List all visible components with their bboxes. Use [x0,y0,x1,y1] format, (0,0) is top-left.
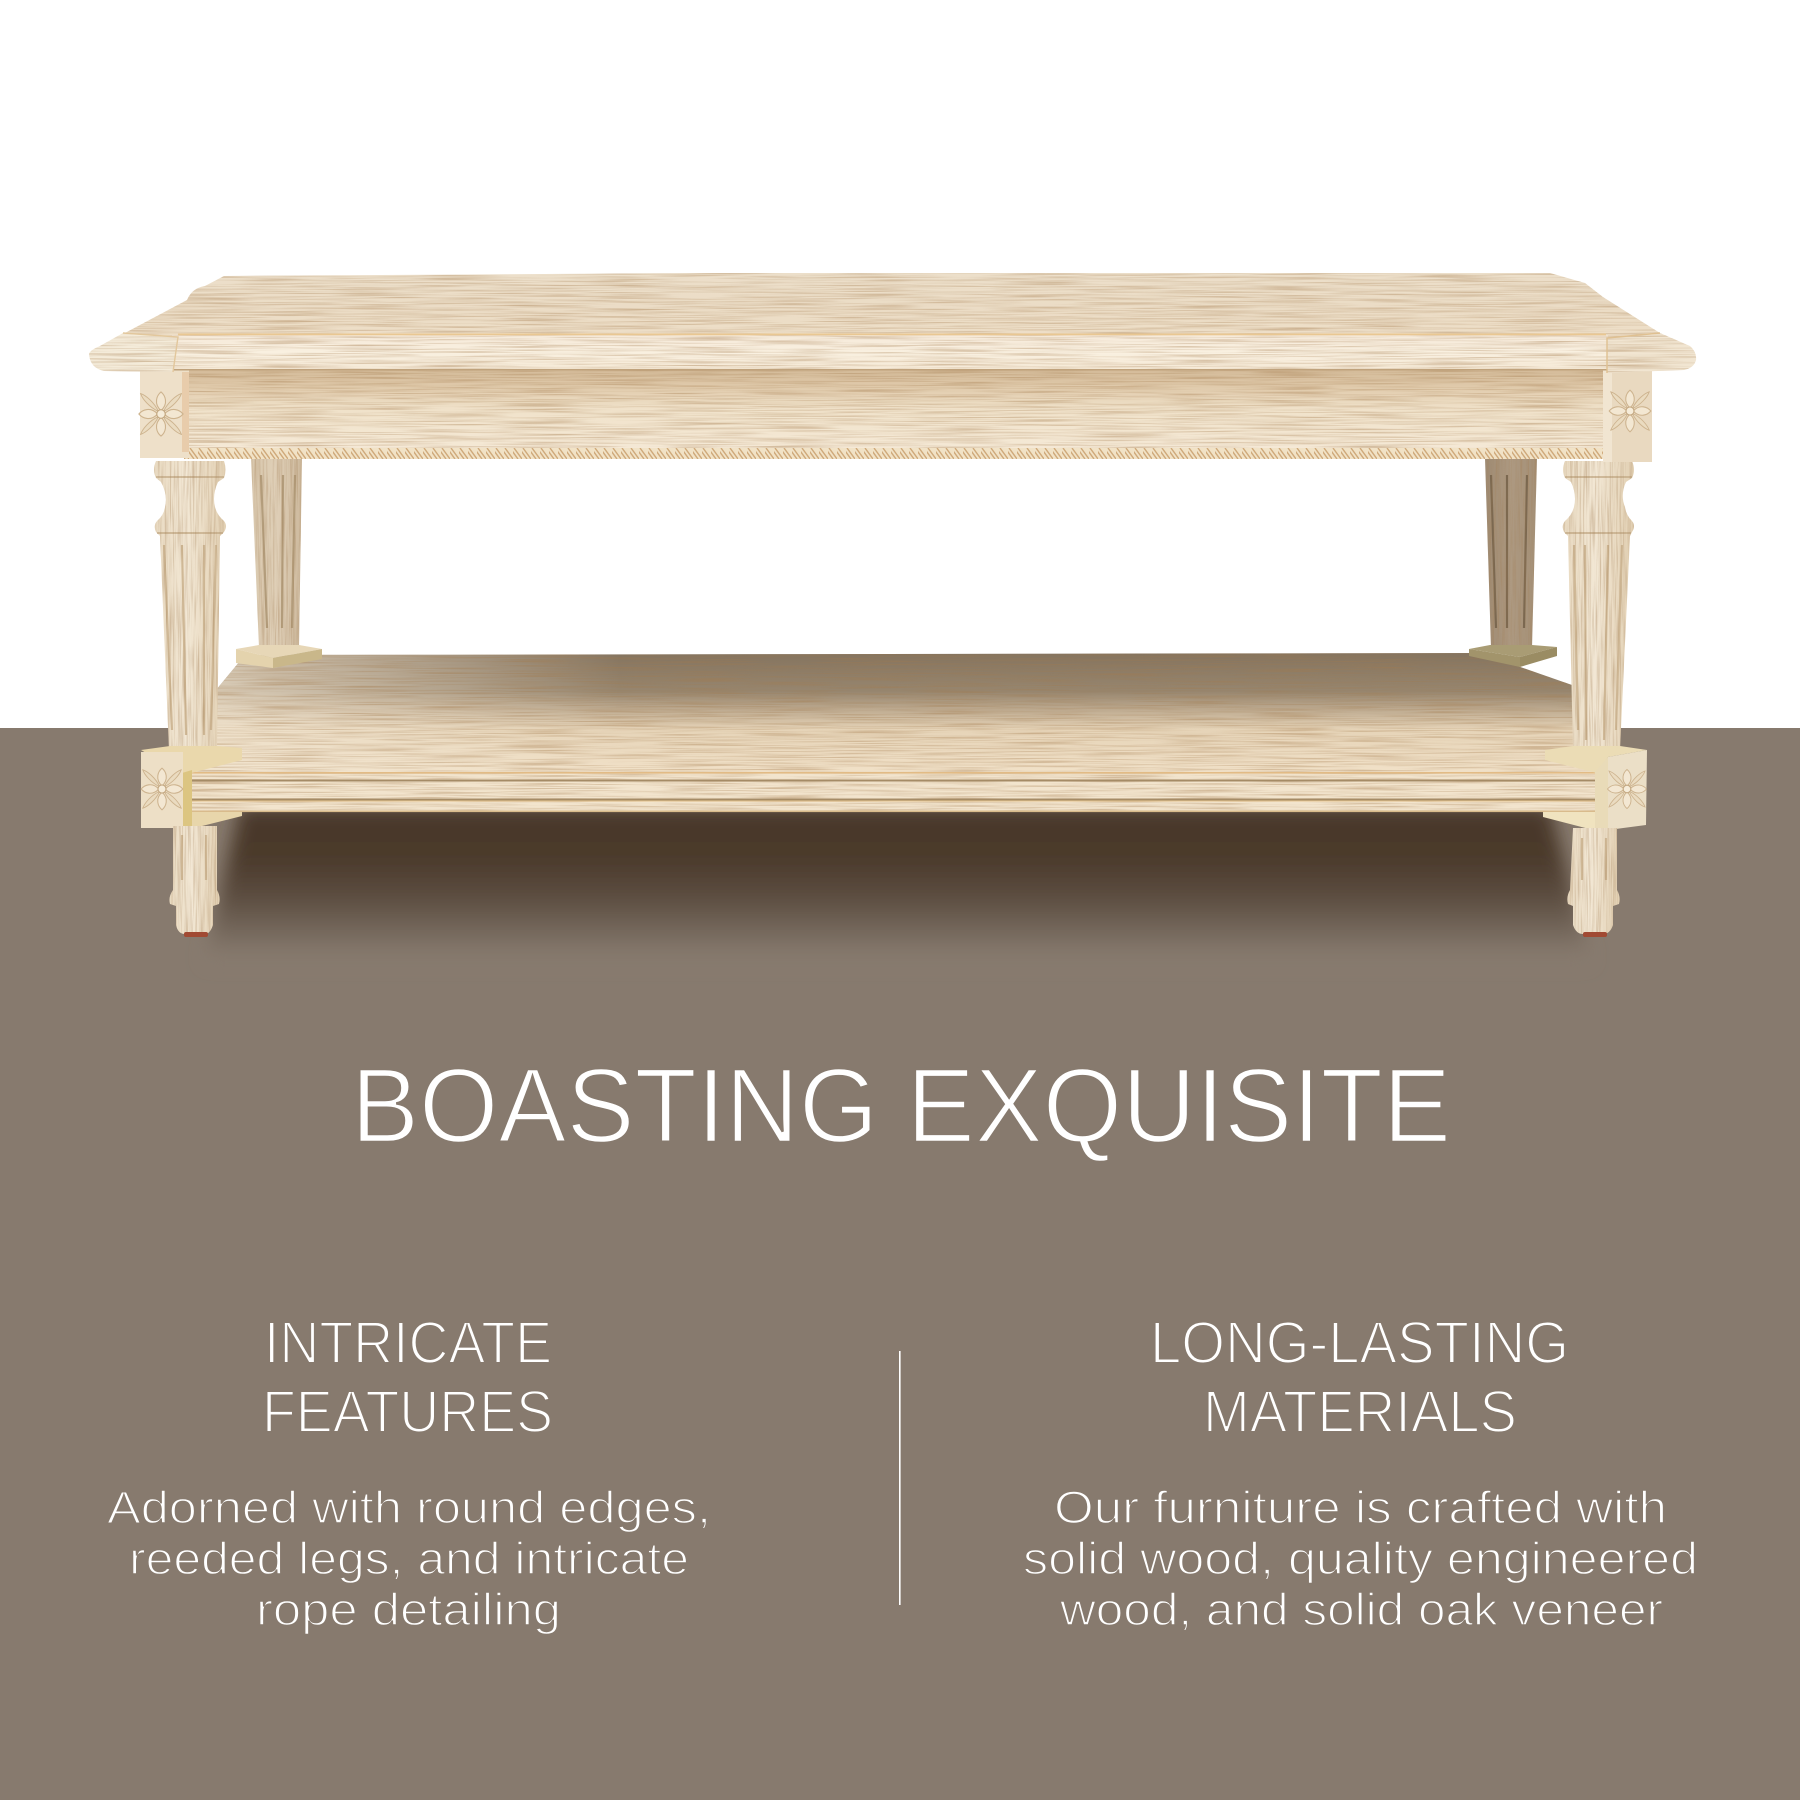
front right lower block [1543,746,1647,831]
right feature description: Our furniture is crafted with [1054,1482,1667,1533]
table top left corner bevel [89,333,178,372]
front left leg [141,461,242,937]
left feature column [107,1310,711,1635]
left feature heading: FEATURES [262,1379,553,1445]
rosette carving [139,392,183,436]
floor shadow under table [205,806,1590,962]
front right leg [1543,461,1647,937]
main heading: BOASTING EXQUISITE [351,1047,1451,1165]
back left plinth [236,645,322,668]
right feature heading: MATERIALS [1203,1379,1517,1445]
back left leg shaft [251,458,302,648]
table top surface [120,273,1660,340]
shelf top surface [193,653,1597,773]
right feature description: wood, and solid oak veneer [1059,1584,1663,1635]
coffee table illustration [89,273,1696,937]
left feature description: rope detailing [256,1584,561,1635]
back right leg shaft [1485,458,1537,648]
right feature description: solid wood, quality engineered [1023,1533,1698,1584]
back right leg [1469,458,1557,667]
rope detail [184,448,1608,459]
right feature description [1023,1482,1698,1635]
back right plinth [1469,645,1557,667]
left feature description: reeded legs, and intricate [129,1533,689,1584]
left feature heading: INTRICATE [264,1310,552,1376]
table top front edge [172,334,1608,370]
front right foot [1567,828,1620,937]
left feature heading [262,1310,553,1445]
rosette carving [1608,770,1646,808]
rosette carving [1609,390,1651,432]
table top right corner bevel [1607,333,1696,373]
column divider [899,1351,901,1605]
front left leg upper shaft [154,461,226,750]
left corner block [139,370,189,458]
left feature description [107,1482,711,1635]
white upper background [0,0,1800,728]
lower shelf [190,653,1597,812]
upper table top assembly [89,273,1696,462]
right corner block [1603,370,1652,462]
front right leg upper shaft [1563,461,1634,750]
shelf front moulding [190,772,1596,812]
back left leg [236,458,322,668]
right feature heading [1150,1310,1569,1445]
taupe lower panel [0,728,1800,1800]
right feature column [1023,1310,1698,1635]
right feature heading: LONG-LASTING [1150,1310,1569,1376]
left feature description: Adorned with round edges, [107,1482,711,1533]
rosette carving [141,768,183,810]
front left foot [169,826,220,937]
apron [186,369,1610,449]
front left lower block [141,746,242,829]
